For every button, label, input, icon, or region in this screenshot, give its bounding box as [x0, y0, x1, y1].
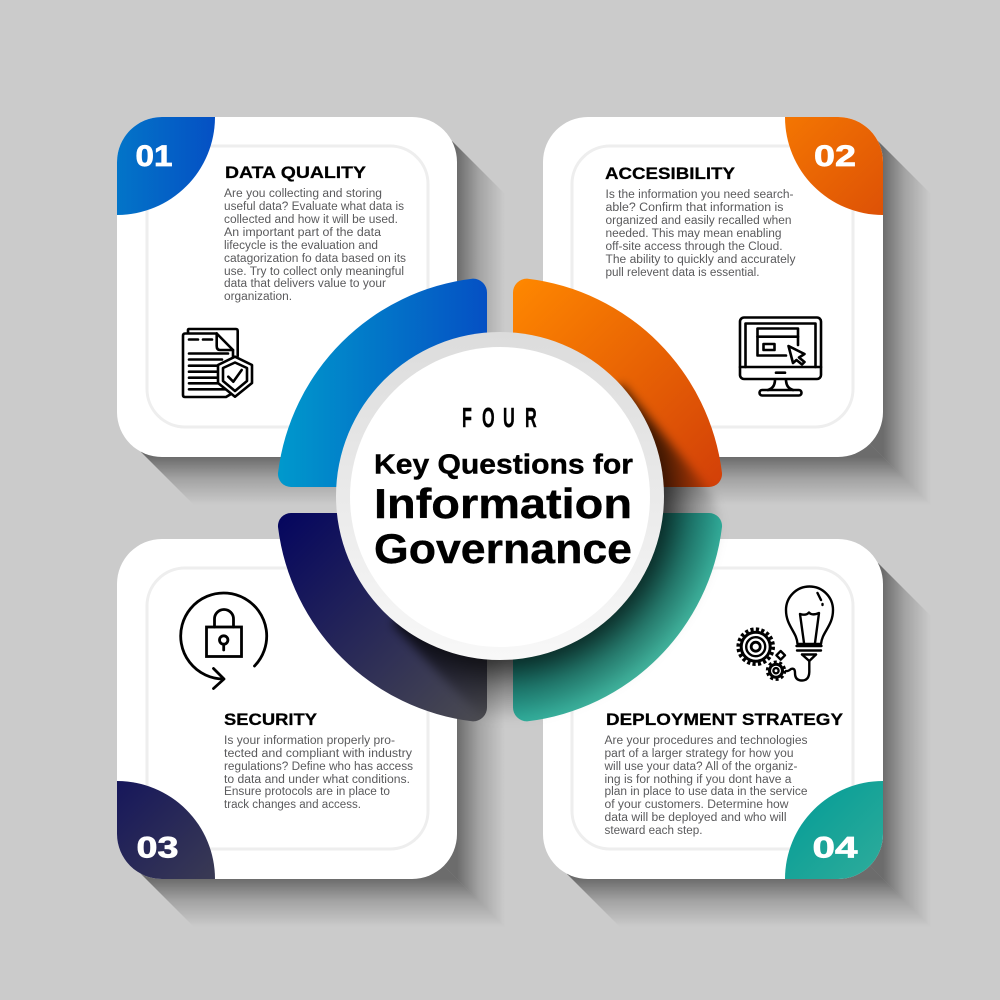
corner tab 01 [117, 117, 215, 215]
text: deployment strategy body: Are your procedures and technologies [604, 735, 808, 747]
text: security body: to data and under what conditions. [224, 774, 410, 786]
center circle shadow [392, 384, 735, 735]
panel: data quality [117, 117, 457, 457]
ring sector: blue [278, 279, 487, 487]
text: security body: Is your information properly pro- [224, 735, 395, 747]
text: security body: tected and compliant with industry [224, 748, 412, 760]
text: accesibility body: Is the information you need search- [606, 189, 794, 201]
icon: document with shield [183, 329, 252, 397]
icon: light bulb and gears [738, 586, 833, 680]
text: deployment strategy body: steward each step. [604, 825, 702, 837]
text: accesibility body: organized and easily recalled when [606, 215, 792, 227]
text: data quality body: use. Try to collect only meaningful [224, 266, 404, 278]
heading: data quality: DATA QUALITY [225, 163, 367, 182]
text: data quality body: data that delivers value to your [224, 278, 386, 290]
text: accesibility body: needed. This may mean enabling [606, 228, 782, 240]
title kicker: FOUR [462, 401, 537, 433]
card shadows [141, 141, 931, 927]
text: deployment strategy body: of your customers. Determine how [604, 799, 789, 811]
corner tab 04 [785, 781, 883, 879]
text: data quality body: organization. [224, 291, 292, 303]
text: deployment strategy body: ing is for nothing if you dont have a [604, 774, 792, 786]
title line 2: Information [374, 480, 632, 527]
center circle [336, 332, 664, 660]
text: data quality body: lifecycle is the evaluation and [224, 240, 378, 252]
ring sector: teal [513, 513, 722, 721]
ring sector: orange [513, 279, 722, 487]
text: accesibility body: able? Confirm that information is [606, 202, 784, 214]
icon: monitor with cursor [740, 318, 821, 396]
title line 1: Key Questions for [374, 448, 633, 480]
number 01: 01 [136, 140, 172, 173]
infographic canvas [117, 117, 926, 922]
text: data quality body: collected and how it will be used. [224, 214, 398, 226]
text: deployment strategy body: plan in place to use data in the service [604, 786, 808, 798]
ring sector: navy [278, 513, 487, 721]
heading: security: SECURITY [224, 710, 318, 729]
text: security body: track changes and access. [224, 799, 361, 811]
text: security body [224, 735, 413, 811]
number 02: 02 [814, 140, 856, 173]
text: data quality body: An important part of the data [224, 227, 382, 239]
text: data quality body: catagorization fo data based on its [224, 253, 406, 265]
icon: lock with circular arrow [181, 593, 267, 688]
text: deployment strategy body [603, 735, 808, 837]
text: accesibility body: off-site access through the Cloud. [606, 241, 782, 253]
text: security body: Ensure protocols are in place to [224, 786, 390, 798]
heading: deployment strategy: DEPLOYMENT STRATEGY [606, 710, 844, 729]
corner tab 03 [117, 781, 215, 879]
heading: accesibility: ACCESIBILITY [605, 164, 736, 183]
panel: accesibility [543, 117, 883, 457]
panel: security [117, 539, 457, 879]
title line 3: Governance [374, 525, 632, 572]
text: security body: regulations? Define who has access [224, 761, 413, 773]
text: data quality body: Are you collecting and storing [224, 188, 382, 200]
text: accesibility body: pull relevent data is essential. [606, 267, 760, 279]
number 04: 04 [812, 832, 858, 864]
panel: deployment strategy [543, 539, 883, 879]
text: data quality body: useful data? Evaluate what data is [224, 201, 404, 213]
number 03: 03 [136, 832, 178, 864]
text: deployment strategy body: data will be deployed and who will [604, 812, 786, 824]
text: accesibility body [606, 189, 796, 279]
corner tab 02 [785, 117, 883, 215]
text: accesibility body: The ability to quickly and accurately [606, 254, 796, 266]
text: data quality body [224, 188, 406, 303]
text: deployment strategy body: will use your data? All of the organiz- [603, 761, 798, 773]
text: deployment strategy body: part of a larger strategy for how you [604, 748, 794, 760]
